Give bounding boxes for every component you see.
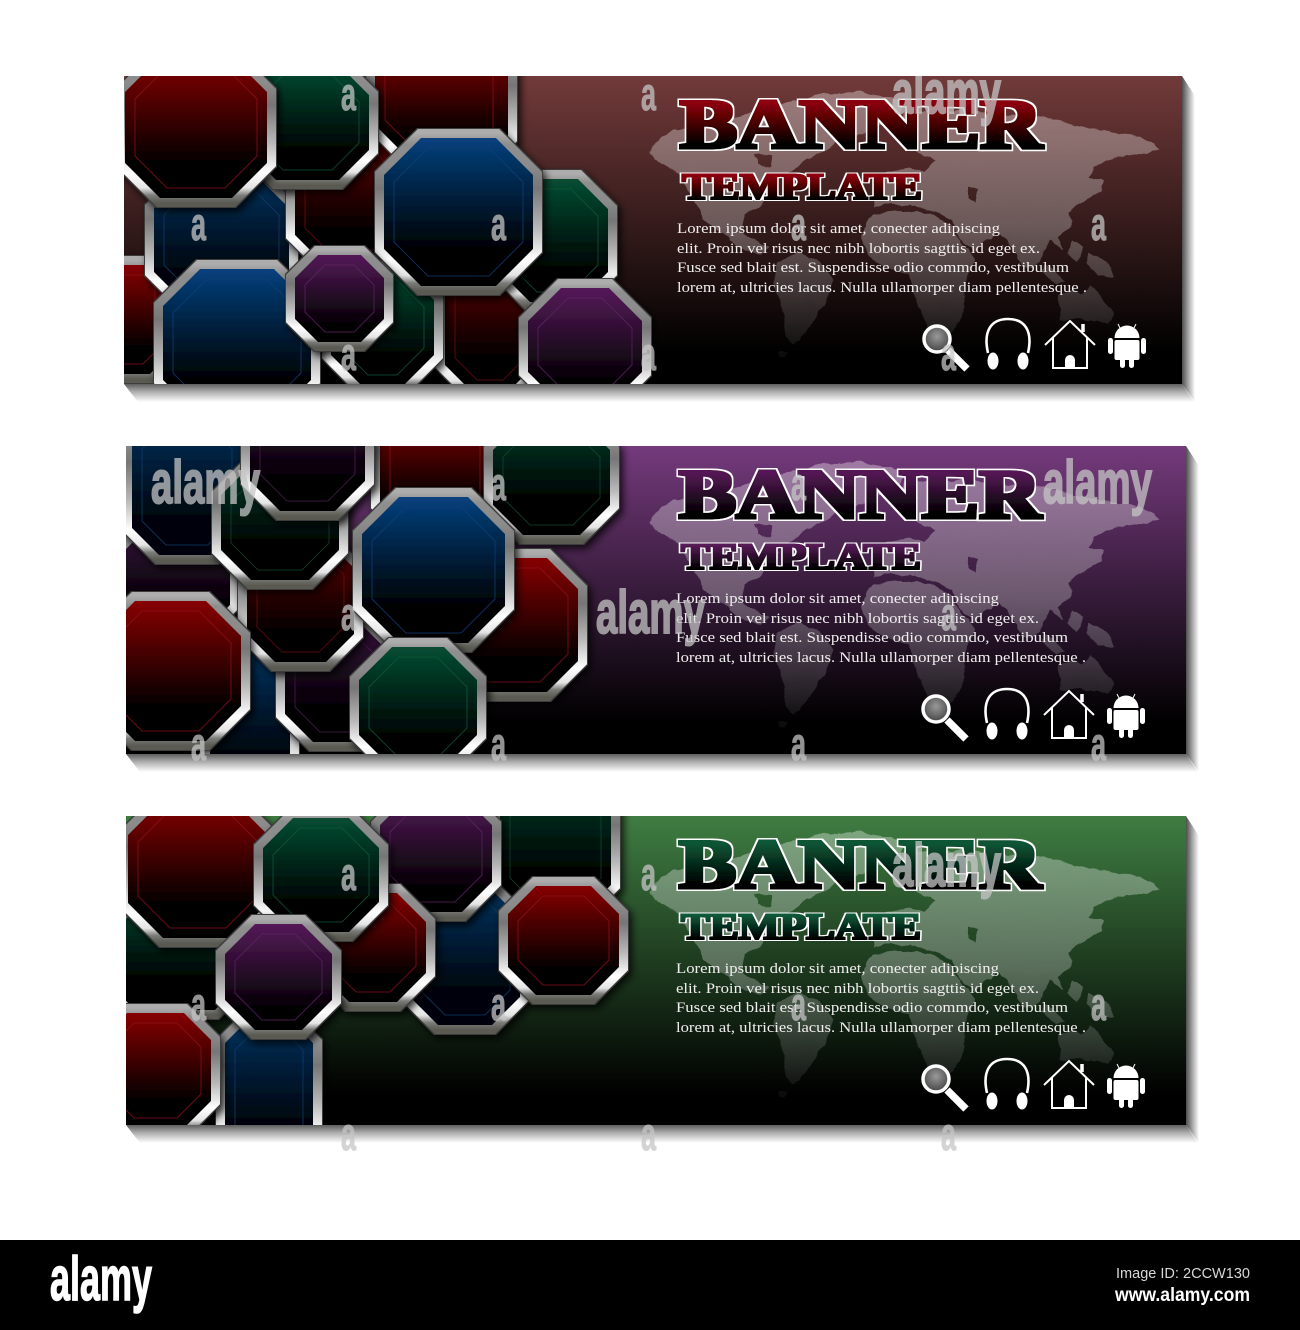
banner 2 body text xyxy=(676,591,1086,666)
banner 3: green xyxy=(126,816,1198,1142)
stock watermarks: a xyxy=(791,718,806,770)
icon: headphones xyxy=(986,1059,1028,1110)
stock watermarks: a xyxy=(341,588,356,640)
banner 3 heading: BANNER xyxy=(679,826,1042,904)
icon: headphones xyxy=(986,689,1028,740)
stock watermarks: a xyxy=(491,718,506,770)
stock watermarks: a xyxy=(341,328,356,380)
icon: house xyxy=(1044,1061,1094,1108)
stock watermarks xyxy=(151,59,1152,1160)
banner 3 body text: Lorem ipsum dolor sit amet, conecter adipiscing xyxy=(676,961,1000,977)
stock watermarks: a xyxy=(941,588,956,640)
banner 1 heading: BANNER xyxy=(680,86,1043,164)
stock watermarks: a xyxy=(1091,718,1106,770)
banner 1 body text: elit. Proin vel risus nec nibh lobortis sagttis id eget ex. xyxy=(677,241,1040,257)
stock watermarks: a xyxy=(491,458,506,510)
stock watermarks: a xyxy=(641,68,656,120)
icon: house xyxy=(1044,691,1094,738)
banner 2 octagon cluster xyxy=(126,446,628,754)
banner 2: purple xyxy=(126,446,1198,771)
banner 1 world map xyxy=(650,92,1160,357)
stock watermarks: alamy xyxy=(1043,449,1152,516)
stock watermarks: a xyxy=(791,198,806,250)
banner 3 body text xyxy=(676,961,1086,1036)
banner 2 body text: elit. Proin vel risus nec nibh lobortis sagttis id eget ex. xyxy=(676,611,1039,627)
banner 1 body text: Lorem ipsum dolor sit amet, conecter adipiscing xyxy=(677,221,1001,237)
banner 2 world map xyxy=(650,462,1160,727)
stock watermarks: a xyxy=(641,848,656,900)
stock watermarks: alamy xyxy=(151,449,260,516)
icon: android xyxy=(1108,324,1146,368)
stock watermarks: a xyxy=(191,978,206,1030)
icon: magnifier xyxy=(923,1066,966,1109)
stock watermarks: a xyxy=(641,328,656,380)
banner 1 copy block xyxy=(677,86,1146,370)
banner 3 extruded shadow xyxy=(126,816,1199,1143)
banner 1: red xyxy=(124,76,1194,401)
stock watermarks: a xyxy=(191,198,206,250)
stock watermarks: a xyxy=(791,458,806,510)
stock watermarks: a xyxy=(941,328,956,380)
website: www.alamy.com xyxy=(1114,1285,1250,1306)
banner 3 body text: lorem at, ultricies lacus. Nulla ullamorper diam pellentesque . xyxy=(676,1020,1086,1036)
image id: Image ID: 2CCW130 xyxy=(1116,1265,1250,1282)
banner 2 background xyxy=(126,446,1186,754)
stock watermarks: a xyxy=(341,848,356,900)
icon: magnifier xyxy=(923,696,966,739)
stock watermarks: a xyxy=(341,1108,356,1160)
stock watermarks: a xyxy=(491,198,506,250)
banner 1 body text: lorem at, ultricies lacus. Nulla ullamorper diam pellentesque . xyxy=(677,280,1087,296)
stock watermarks: a xyxy=(191,718,206,770)
icon: house xyxy=(1045,321,1095,368)
banner 3 world map xyxy=(650,832,1160,1097)
stock watermarks: a xyxy=(791,978,806,1030)
banner 3 body text: Fusce sed blait est. Suspendisse odio commdo, vestibulum xyxy=(676,1000,1068,1016)
stock watermarks: a xyxy=(1091,198,1106,250)
stock watermarks: alamy xyxy=(892,832,1001,899)
banner 3 octagon cluster xyxy=(126,816,636,1125)
footer logo: alamy xyxy=(50,1245,152,1314)
banner 3 copy block xyxy=(676,826,1145,1110)
banner 1 octagon cluster xyxy=(124,76,652,384)
icon: android xyxy=(1107,694,1145,738)
banner 2 heading: BANNER xyxy=(679,456,1042,534)
stock watermarks: a xyxy=(641,1108,656,1160)
banner 2 body text: Fusce sed blait est. Suspendisse odio commdo, vestibulum xyxy=(676,630,1068,646)
banner 1 body text: Fusce sed blait est. Suspendisse odio commdo, vestibulum xyxy=(677,260,1069,276)
banner 2 copy block xyxy=(676,456,1145,740)
banner 3 body text: elit. Proin vel risus nec nibh lobortis sagttis id eget ex. xyxy=(676,981,1039,997)
icon: headphones xyxy=(987,319,1029,370)
stock watermarks: a xyxy=(491,978,506,1030)
stock watermarks: a xyxy=(341,68,356,120)
banner 1 extruded shadow xyxy=(124,76,1195,402)
banner 2 extruded shadow xyxy=(126,446,1199,772)
banner 1 background xyxy=(124,76,1182,384)
icon: android xyxy=(1107,1064,1145,1108)
stock watermarks: alamy xyxy=(892,59,1001,126)
banner 2 subheading: TEMPLATE xyxy=(681,537,921,578)
banner 1 subheading: TEMPLATE xyxy=(682,167,922,208)
stock watermarks: alamy xyxy=(596,579,705,646)
footer bar xyxy=(0,1240,1300,1330)
icon: magnifier xyxy=(924,326,967,369)
stock watermarks: a xyxy=(941,1108,956,1160)
banner 1 body text xyxy=(677,221,1087,296)
banner 2 body text: lorem at, ultricies lacus. Nulla ullamorper diam pellentesque . xyxy=(676,650,1086,666)
banner 2 body text: Lorem ipsum dolor sit amet, conecter adipiscing xyxy=(676,591,1000,607)
banner 3 background xyxy=(126,816,1186,1125)
banner 3 subheading: TEMPLATE xyxy=(681,907,921,948)
stock watermarks: a xyxy=(1091,978,1106,1030)
